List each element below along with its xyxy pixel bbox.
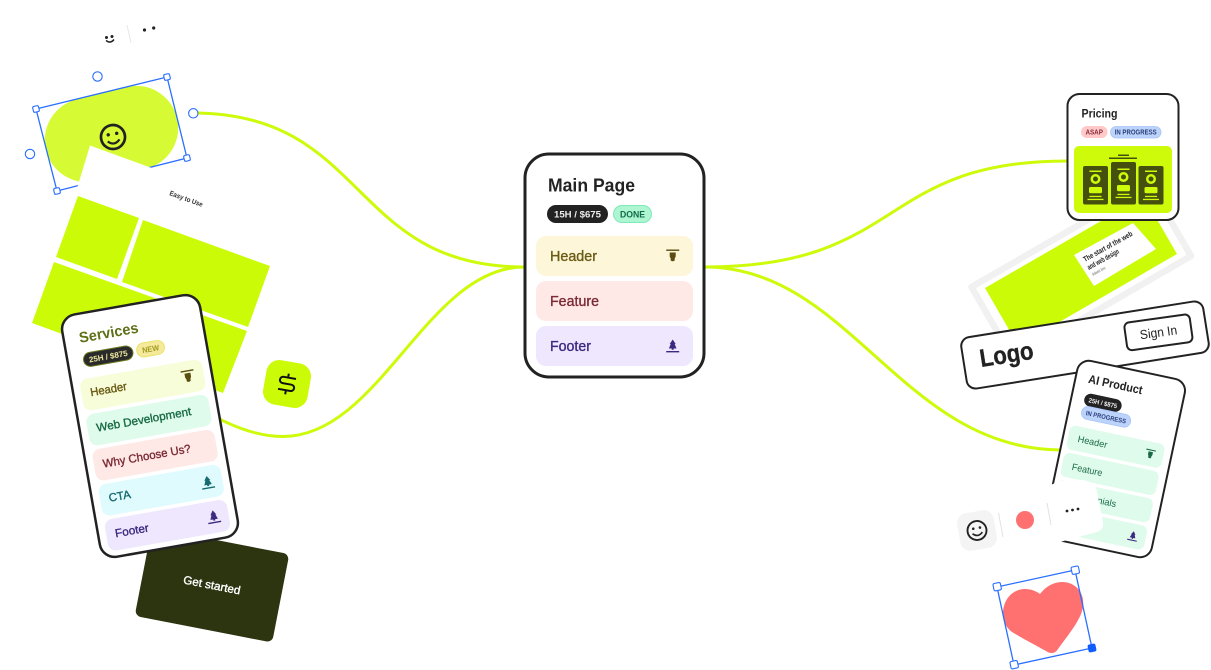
row: Footer: [536, 326, 693, 366]
row: Footer: Footer: [550, 339, 591, 355]
panel: Pricing card: [1068, 94, 1178, 220]
badge: DONE: DONE: [620, 209, 645, 219]
row: Feature: Feature: [550, 294, 599, 310]
row: CTA: CTA: [108, 489, 132, 505]
row: Header: [1066, 425, 1166, 469]
badge: hours and price: 25H / $875: [1088, 397, 1118, 410]
row: Feature: Feature: [1071, 462, 1103, 479]
button: Sign In: [1124, 314, 1193, 351]
badge: hours and price: 15H / $675: [554, 209, 601, 219]
feature tile 1: [56, 196, 139, 279]
connector: main page to AI product: [705, 267, 1062, 450]
badge: ASAP: ASAP: [1085, 128, 1103, 136]
row: Header: Header: [550, 249, 597, 265]
article card: and web design: [1086, 247, 1121, 272]
badge: hours and price: [82, 345, 134, 367]
connector: services card to main page: [205, 267, 524, 436]
pricing illustration: [1074, 146, 1172, 213]
connector: top-left element to main page: [193, 113, 524, 267]
article card: [1074, 223, 1156, 286]
toolbar: reactions: [955, 480, 1103, 552]
row: Web Development: [85, 394, 213, 447]
heading: AI Product: AI Product: [1087, 372, 1144, 397]
panel: AI Product card: [1042, 359, 1187, 559]
article card: The start of the web: [1082, 229, 1134, 264]
row: Footer: Footer: [114, 523, 150, 540]
badge: hours and price: 25H / $875: [88, 349, 129, 365]
button: Sign In: Sign In: [1139, 322, 1178, 342]
icon: lime shape with selection box: [25, 72, 198, 195]
heading: Services: Services: [78, 320, 140, 347]
badge: IN PROGRESS: IN PROGRESS: [1085, 410, 1127, 426]
badge: NEW: NEW: [142, 343, 160, 355]
row: Why Choose Us?: Why Choose Us?: [102, 443, 192, 471]
heading: Main Page: Main Page: [548, 176, 635, 196]
row: Testimonials: [1054, 479, 1154, 523]
article card: Aleet Inc: [1091, 265, 1107, 277]
panel: Services card: [60, 293, 240, 559]
row: Feature: [536, 281, 693, 321]
button card: Get started: [135, 527, 289, 643]
row: Footer: [1048, 507, 1148, 551]
panel: web article frame: [972, 184, 1191, 359]
badge: DONE: [614, 206, 652, 222]
icon: heart with selection box: [993, 566, 1097, 669]
icon: smiley tile: [955, 509, 999, 552]
row: Why Choose Us?: [91, 429, 219, 482]
feature tile 2: [122, 220, 270, 327]
heading: Easy to Use: Easy to Use: [168, 190, 204, 209]
icon: dollar tile: [261, 358, 313, 410]
row: Web Development: Web Development: [96, 406, 193, 435]
badge: hours and price: [547, 205, 608, 223]
row: Header: Header: [89, 381, 128, 399]
badge: hours and price: [1083, 393, 1123, 413]
panel: Main Page card: [525, 154, 704, 377]
heading: Pricing: Pricing: [1082, 108, 1118, 120]
connector: main page to pricing: [705, 161, 1067, 267]
row: Footer: Footer: [1059, 516, 1087, 532]
icon: faint toolbar at top: [105, 25, 155, 43]
logo text: Logo: [978, 337, 1035, 373]
badge: NEW: [136, 339, 166, 358]
icon: more dots: [1066, 508, 1079, 512]
row: Testimonials: Testimonials: [1065, 489, 1117, 510]
button card: Get started: Get started: [182, 575, 241, 597]
row: Footer: [104, 499, 231, 552]
badge: IN PROGRESS: IN PROGRESS: [1115, 130, 1157, 136]
feature tile 3: [32, 262, 247, 393]
row: Header: Header: [1077, 434, 1108, 451]
panel: Easy to Use feature card: [32, 146, 300, 393]
panel: Logo navbar: [960, 300, 1210, 390]
row: CTA: [97, 464, 225, 517]
badge: IN PROGRESS: [1080, 405, 1132, 428]
row: Feature: [1060, 452, 1160, 496]
icon: red dot: [1016, 511, 1034, 529]
row: Header: [79, 359, 207, 412]
row: Header: [536, 236, 693, 276]
